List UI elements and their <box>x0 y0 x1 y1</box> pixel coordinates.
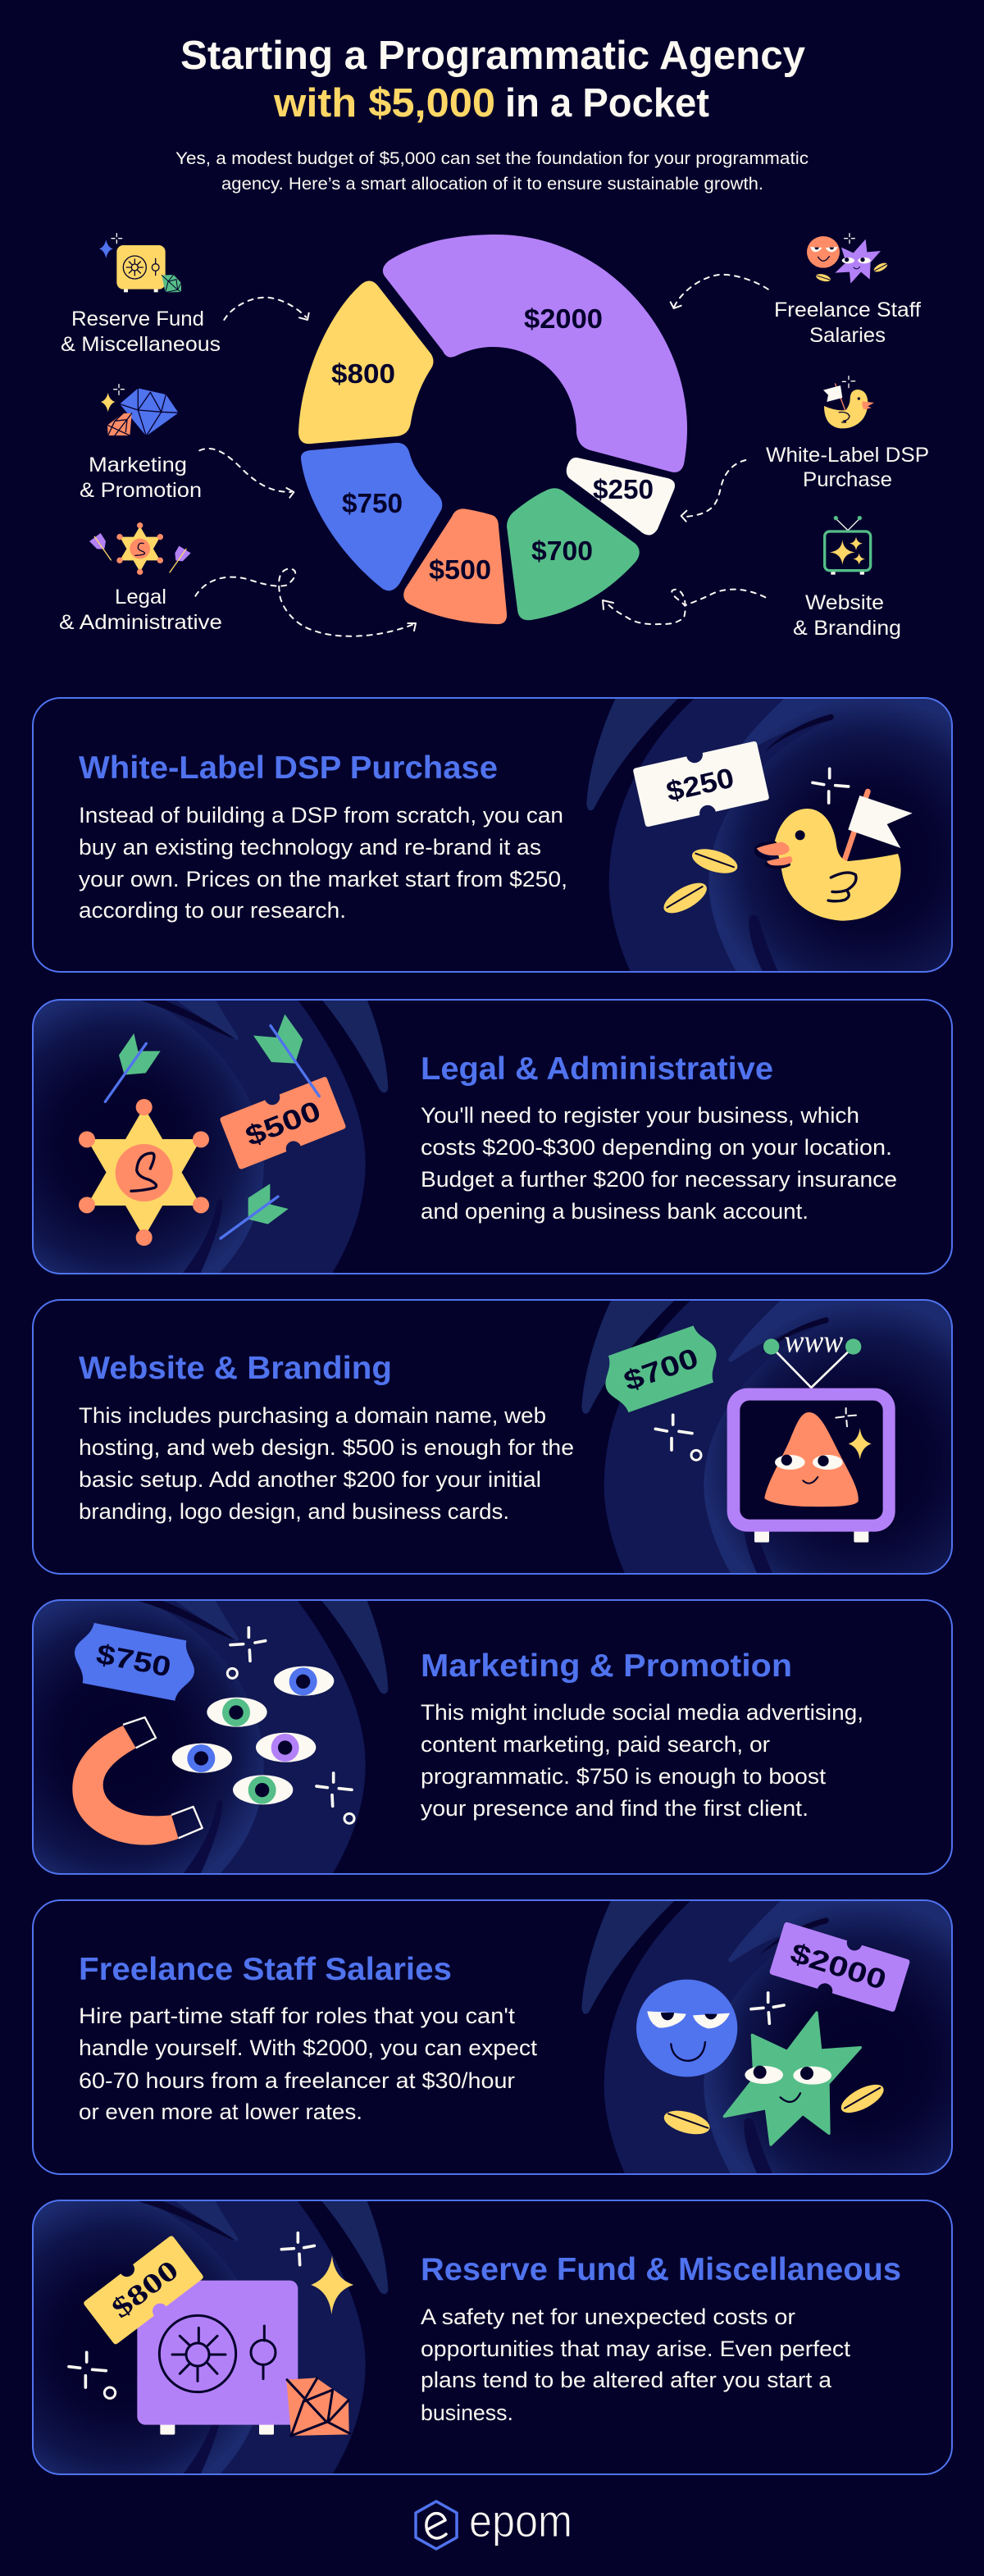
segment: $2000 freelance <box>383 235 687 472</box>
heading: White-Label DSP Purchase <box>79 750 498 786</box>
body text: or even more at lower rates. <box>79 2100 362 2124</box>
coins <box>664 849 738 914</box>
body text <box>79 1403 574 1524</box>
arrow: freelance to segment <box>671 275 768 308</box>
body text: A safety net for unexpected costs or <box>421 2305 795 2329</box>
green star <box>724 2013 860 2145</box>
coins <box>662 2079 888 2139</box>
label: white-label: Purchase <box>803 468 892 491</box>
panel: marketing and promotion <box>23 1592 952 1879</box>
tv <box>727 1324 895 1543</box>
label: website: Website <box>805 591 884 614</box>
label: legal <box>59 586 222 634</box>
ticket $750 <box>75 1622 194 1701</box>
panel: website and branding <box>33 1292 970 1579</box>
segment: $2000 freelance: $2000 <box>524 303 603 334</box>
icon: sheriff badge <box>89 522 191 575</box>
illustration: safe <box>23 2192 388 2479</box>
heading: Legal & Administrative <box>421 1051 773 1087</box>
ticket $800: $800 <box>106 2255 184 2324</box>
illustration: magnet and eyes <box>23 1592 388 1879</box>
donut chart <box>298 235 687 624</box>
sparkle <box>751 1993 784 2023</box>
panel: white-label dsp purchase <box>33 689 975 976</box>
right labels <box>766 299 929 640</box>
body text: handle yourself. With $2000, you can expect <box>79 2036 538 2060</box>
arrow: white-label to segment <box>681 460 745 522</box>
ticket $2000 <box>769 1922 910 2013</box>
arrow: legal to segment <box>195 568 416 636</box>
label: reserve fund: & Miscellaneous <box>61 333 221 356</box>
label: marketing: Marketing <box>89 454 187 476</box>
body text: business. <box>421 2400 513 2425</box>
segment: $500 legal: $500 <box>429 554 491 585</box>
ticket $750: $750 <box>93 1639 173 1683</box>
label: marketing <box>80 454 202 502</box>
segment: $700 website: $700 <box>531 536 593 566</box>
body text: 60-70 hours from a freelancer at $30/hour <box>79 2068 515 2093</box>
title <box>180 34 805 125</box>
body text: and opening a business bank account. <box>421 1199 809 1224</box>
arrow: marketing to segment <box>199 449 294 498</box>
body text <box>79 2004 538 2124</box>
logo: epom <box>416 2495 572 2549</box>
segment: $750 marketing <box>301 443 442 590</box>
body text: This might include social media advertising, <box>421 1700 863 1725</box>
segment: $800 reserve: $800 <box>331 358 395 389</box>
body text: This includes purchasing a domain name, web <box>79 1403 546 1428</box>
icon: duck <box>823 376 874 428</box>
duck <box>756 791 913 921</box>
intro text <box>175 149 809 194</box>
badge <box>79 1099 209 1246</box>
arrow: reserve fund to segment <box>224 298 309 320</box>
label: legal: & Administrative <box>59 611 222 634</box>
body text: programmatic. $750 is enough to boost <box>421 1764 827 1789</box>
segment: $800 reserve <box>298 280 433 444</box>
sparkles and star <box>69 2233 353 2398</box>
panel: legal and administrative <box>23 991 952 1278</box>
sparkles <box>227 1628 354 1823</box>
body text: branding, logo design, and business cards. <box>79 1499 509 1524</box>
body text: You'll need to register your business, which <box>421 1103 859 1128</box>
body text <box>421 1103 897 1224</box>
segment: $250 white-label: $250 <box>593 474 654 504</box>
title: in a Pocket <box>505 81 709 125</box>
body text: content marketing, paid search, or <box>421 1732 770 1757</box>
body text: according to our research. <box>79 898 346 923</box>
body text: buy an existing technology and re-brand it as <box>79 835 541 859</box>
panel: freelance staff salaries <box>33 1892 970 2179</box>
heading: Freelance Staff Salaries <box>79 1952 452 1987</box>
border <box>33 1300 952 1574</box>
label: freelance: Freelance Staff <box>774 299 921 321</box>
label: website: & Branding <box>793 617 901 640</box>
ticket $700: $700 <box>620 1343 703 1397</box>
label: legal: Legal <box>115 586 166 609</box>
icon: diamonds <box>101 385 179 436</box>
border <box>33 1000 952 1274</box>
panel: reserve fund and miscellaneous <box>23 2192 952 2479</box>
icon: tv <box>825 516 871 575</box>
label: white-label: White-Label DSP <box>766 444 929 467</box>
segment: $750 marketing: $750 <box>342 488 403 518</box>
ticket $700 <box>605 1325 717 1412</box>
intro text: agency. Here’s a smart allocation of it to ensure sustainable growth. <box>221 175 763 194</box>
ticket $2000: $2000 <box>786 1937 890 1996</box>
icon: safe <box>99 234 181 293</box>
label: reserve fund: Reserve Fund <box>71 308 204 331</box>
right icons and arrows <box>603 234 889 624</box>
illustration: duck <box>586 699 951 971</box>
left labels <box>59 308 222 634</box>
magnet <box>72 1717 203 1845</box>
ticket $250 <box>632 741 769 828</box>
safe <box>137 2281 298 2435</box>
illustration: characters <box>581 1892 970 2179</box>
icon: hexagon <box>416 2501 457 2549</box>
body text <box>79 803 567 923</box>
intro text: Yes, a modest budget of $5,000 can set the foundation for your programmatic <box>175 149 809 168</box>
darts <box>105 1014 303 1238</box>
title: Starting a Programmatic Agency <box>180 34 805 78</box>
body text: opportunities that may arise. Even perfect <box>421 2337 851 2361</box>
ticket $500: $500 <box>241 1095 326 1152</box>
heading: Marketing & Promotion <box>421 1648 792 1684</box>
tv: www <box>784 1324 843 1360</box>
label: white-label <box>766 444 929 491</box>
body text: Instead of building a DSP from scratch, you can <box>79 803 563 828</box>
body text: your own. Prices on the market start from $250, <box>79 867 567 891</box>
heading: Website & Branding <box>79 1351 392 1386</box>
body text: plans tend to be altered after you start a <box>421 2368 832 2392</box>
sparkle and ring <box>655 1415 701 1460</box>
segment: $250 white-label <box>567 458 675 536</box>
label: reserve fund <box>61 308 221 356</box>
body text <box>421 1700 863 1821</box>
segment: $700 website <box>507 488 640 620</box>
label: website <box>793 591 901 640</box>
wordmark: epom <box>469 2495 572 2546</box>
segment: $500 legal <box>403 508 507 624</box>
illustration: sheriff badge <box>23 991 388 1278</box>
border <box>33 1900 952 2174</box>
body text <box>421 2305 851 2425</box>
ticket $500 <box>219 1076 347 1170</box>
body text: Hire part-time staff for roles that you can't <box>79 2004 516 2028</box>
sparkle <box>813 768 849 803</box>
label: freelance <box>774 299 921 347</box>
border <box>33 698 952 972</box>
label: freelance: Salaries <box>809 324 886 347</box>
left icons and arrows <box>89 234 416 636</box>
arrow: website to segment <box>603 590 765 624</box>
body text: your presence and find the first client. <box>421 1796 809 1821</box>
title: with $5,000 <box>273 81 495 125</box>
blue face <box>636 1980 737 2077</box>
heading: Reserve Fund & Miscellaneous <box>421 2252 901 2287</box>
body text: hosting, and web design. $500 is enough for the <box>79 1435 574 1460</box>
border <box>33 1600 952 1874</box>
eyes <box>172 1666 334 1804</box>
ticket $800 <box>83 2235 204 2346</box>
ticket $250: $250 <box>663 763 737 808</box>
body text: costs $200-$300 depending on your location. <box>421 1135 892 1160</box>
gem <box>286 2378 350 2436</box>
border <box>33 2200 952 2474</box>
icon: staff faces <box>807 234 889 284</box>
body text: Budget a further $200 for necessary insurance <box>421 1167 897 1192</box>
label: marketing: & Promotion <box>80 479 202 502</box>
illustration: tv <box>581 1292 970 1579</box>
body text: basic setup. Add another $200 for your initial <box>79 1467 541 1492</box>
